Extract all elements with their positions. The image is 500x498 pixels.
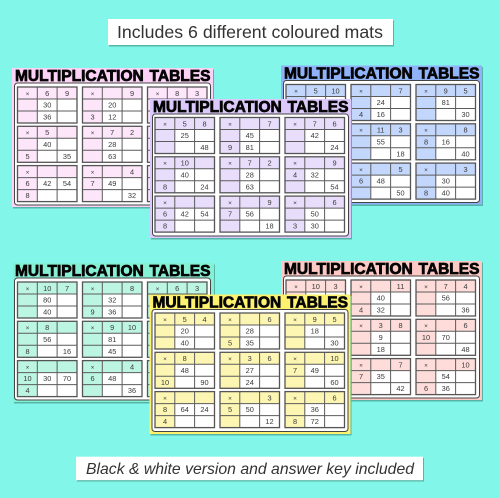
table 7: 64 (181, 405, 189, 414)
table 5 (220, 352, 280, 388)
table 1: × (294, 88, 298, 95)
table 6: 4 (293, 170, 297, 179)
table 2: 12 (108, 112, 116, 122)
table 2: × (359, 88, 363, 95)
table 9: 8 (293, 417, 297, 426)
table 6: 10 (422, 333, 430, 342)
table 1: × (163, 121, 167, 128)
table 1: 10 (43, 284, 51, 293)
table 3: 6 (175, 284, 179, 293)
table 9 (416, 163, 476, 199)
table 5: 7 (110, 128, 114, 137)
table 8 (351, 163, 410, 199)
table 2: 81 (246, 143, 254, 152)
table 7: 54 (63, 179, 71, 188)
table 1: 30 (43, 100, 51, 110)
inner sheet: yellow mat (152, 310, 348, 432)
table 4 (18, 126, 77, 162)
table 3: 7 (313, 119, 317, 128)
table 1: 40 (181, 338, 189, 348)
table 2: 7 (267, 119, 272, 128)
table 8: 3 (267, 393, 272, 402)
table 4: × (163, 356, 167, 363)
table 3: 36 (461, 306, 470, 314)
table 5: 10 (128, 323, 136, 332)
table 4 (155, 157, 214, 193)
inner sheet: pink mat (14, 83, 210, 205)
table 9: 30 (311, 222, 319, 231)
table 1: 4 (202, 315, 207, 324)
table 5: 24 (246, 378, 254, 387)
table 1: 48 (200, 143, 209, 152)
table 8: 50 (246, 405, 254, 414)
table 3: 8 (175, 89, 179, 98)
table 3: 30 (461, 110, 470, 119)
table 1: × (294, 284, 298, 291)
table 1: × (26, 91, 30, 98)
table 8: × (228, 200, 232, 207)
inner sheet: peach mat (284, 276, 480, 398)
table 7: × (163, 395, 167, 402)
table 5: 28 (108, 140, 116, 149)
table 5: 3 (398, 126, 403, 135)
table 5: × (359, 323, 363, 330)
table 9 (148, 166, 207, 202)
table 7: 10 (23, 374, 32, 383)
table 8: 6 (359, 177, 363, 186)
table 2 (351, 84, 410, 120)
table 8: 7 (228, 210, 232, 219)
table 4: × (26, 130, 30, 137)
table 6: 54 (330, 182, 339, 191)
table 8: 7 (398, 360, 403, 369)
table 7: 8 (25, 191, 30, 200)
table 2: 3 (90, 112, 95, 122)
table 2: 4 (359, 306, 363, 314)
table 2: 11 (397, 282, 404, 291)
table 2 (220, 118, 280, 154)
table 5: 63 (246, 182, 254, 191)
table 8: × (91, 364, 95, 371)
table 3: 5 (463, 86, 468, 95)
table 8 (220, 196, 280, 232)
table 3 (285, 313, 344, 349)
table 2 (220, 313, 280, 349)
table 8: 7 (359, 372, 363, 381)
table 5 (351, 124, 410, 160)
table 8: 4 (130, 362, 134, 371)
table 2: 36 (108, 308, 116, 316)
table 9 (285, 196, 344, 232)
table 8: × (359, 362, 363, 369)
table 2: 16 (377, 110, 385, 119)
table 6 (285, 157, 344, 193)
table 8: 36 (128, 386, 136, 395)
table 3: × (293, 121, 297, 128)
table 7: 54 (200, 210, 209, 219)
table 8: 50 (396, 189, 405, 198)
table 8: × (359, 167, 363, 174)
table 4 (155, 352, 214, 388)
table 2 (82, 282, 142, 318)
table 6: 48 (461, 345, 470, 354)
table 2: 24 (377, 98, 385, 107)
table 4: 40 (43, 140, 51, 149)
banner: black and white version note (76, 457, 424, 482)
panel: peach mat (281, 261, 483, 402)
table 7: 6 (163, 210, 167, 219)
table 9: × (293, 395, 297, 402)
table 4: 8 (183, 354, 187, 363)
table 5: 2 (267, 159, 272, 168)
table 6 (148, 126, 207, 162)
table 6: 32 (311, 170, 319, 179)
table 4: 90 (200, 378, 209, 387)
table 6: 10 (330, 354, 339, 363)
table 1: 40 (43, 308, 51, 316)
table 4: 48 (181, 366, 189, 375)
title: peach mat: MULTIPLICATION TABLES (284, 261, 480, 278)
table 1: 10 (331, 86, 340, 95)
table 4: 10 (161, 378, 169, 387)
table 3: 5 (332, 315, 337, 324)
table 8: 48 (108, 374, 116, 383)
table 5: 7 (248, 159, 252, 168)
table 5: 28 (246, 170, 254, 179)
table 2: 35 (246, 338, 254, 348)
inner sheet: purple mat (152, 114, 348, 236)
table 3 (148, 87, 207, 123)
table 3 (148, 282, 207, 318)
table 2: 20 (108, 100, 116, 110)
table 3: × (293, 317, 297, 324)
table 5: 3 (248, 354, 252, 363)
table 9: 8 (424, 189, 428, 198)
table 1: 5 (183, 315, 187, 324)
table 1: 10 (312, 282, 320, 291)
table 8: × (228, 395, 232, 402)
table 2: × (228, 121, 232, 128)
table 8: 56 (246, 210, 254, 219)
table 8 (82, 361, 142, 397)
table 2: 28 (246, 326, 254, 336)
table 9: 50 (311, 210, 319, 219)
table 1: × (163, 317, 167, 324)
table 9: 6 (424, 384, 428, 393)
table 6: 8 (424, 137, 428, 146)
table 4: 40 (181, 170, 189, 179)
table 4: 35 (63, 152, 71, 161)
inner sheet: green mat (14, 278, 210, 400)
table 8: 9 (267, 198, 272, 207)
table 5: × (91, 325, 95, 332)
table 4: 10 (181, 159, 189, 168)
table 6: 6 (463, 321, 468, 330)
table 6: 70 (442, 333, 450, 342)
table 3: 56 (442, 294, 450, 302)
table 7 (286, 163, 346, 199)
table 2: 6 (267, 315, 272, 324)
banner: includes 6 coloured mats (108, 19, 394, 46)
table 8 (220, 392, 280, 428)
table 5: 6 (267, 354, 272, 363)
banner: includes 6 coloured mats: Includes 6 different coloured mats (117, 22, 383, 42)
table 8: 6 (90, 374, 95, 383)
table 4: 5 (45, 128, 49, 137)
table 1 (18, 87, 77, 123)
table 9: × (424, 362, 428, 369)
table 5: × (91, 130, 95, 137)
table 5: 18 (377, 345, 385, 354)
table 9 (148, 361, 207, 397)
table 8: 5 (398, 165, 403, 174)
table 1 (286, 84, 346, 120)
table 5: 81 (108, 335, 116, 344)
table 1 (155, 118, 214, 154)
title: yellow mat: MULTIPLICATION TABLES (152, 294, 348, 311)
table 4 (286, 124, 346, 160)
panel: blue mat (281, 65, 483, 206)
table 5: 9 (379, 333, 383, 342)
table 6: × (424, 128, 428, 135)
table 7: × (26, 169, 30, 176)
table 5: 27 (246, 366, 254, 375)
table 5 (82, 126, 142, 162)
table 7: × (26, 364, 30, 371)
table 5: × (228, 161, 232, 168)
table 4: 24 (200, 182, 209, 191)
table 9: × (293, 200, 297, 207)
table 5: 55 (377, 137, 385, 146)
table 9: 10 (461, 360, 470, 369)
table 5 (82, 321, 142, 357)
table 5: 8 (398, 321, 403, 330)
table 7 (286, 359, 346, 395)
table 6 (416, 319, 476, 355)
table 2: 9 (130, 89, 134, 98)
table 5: × (359, 128, 363, 135)
table 6 (416, 124, 476, 160)
table 5: × (228, 356, 232, 363)
table 5: 18 (396, 149, 405, 158)
table 7 (18, 361, 77, 397)
table 7 (18, 166, 77, 202)
table 3: 9 (313, 315, 317, 324)
table 5 (351, 319, 410, 355)
table 3: 24 (330, 143, 339, 152)
table 2: 40 (377, 294, 385, 302)
table 8 (351, 359, 410, 395)
table 7: 30 (43, 374, 51, 383)
table 8: 4 (130, 167, 134, 176)
table 2: × (228, 317, 232, 324)
table 7: 8 (163, 405, 167, 414)
table 4: × (163, 161, 167, 168)
table 9: 3 (463, 165, 468, 174)
table 3: 81 (442, 98, 450, 107)
table 6: 16 (442, 137, 450, 146)
table 2 (351, 280, 410, 316)
table 8: 5 (228, 405, 232, 414)
table 1: 7 (65, 284, 69, 293)
title: purple mat: MULTIPLICATION TABLES (153, 99, 348, 116)
table 5: 45 (108, 347, 116, 356)
table 5: 63 (108, 152, 116, 161)
table 6: × (293, 161, 297, 168)
table 3 (416, 84, 476, 120)
table 8 (82, 166, 142, 202)
table 3: 3 (195, 284, 199, 293)
table 1: 25 (181, 131, 189, 140)
panel: pink mat (12, 68, 214, 208)
table 3 (285, 118, 344, 154)
table 8: 18 (265, 222, 274, 231)
table 9: 36 (311, 405, 319, 414)
table 4: 16 (63, 347, 71, 356)
table 8: × (91, 169, 95, 176)
table 9: 54 (442, 372, 450, 381)
table 9: 6 (332, 393, 337, 402)
table 3: 18 (311, 326, 319, 336)
table 9 (416, 359, 476, 395)
table 2: 45 (246, 131, 254, 140)
table 2: 8 (130, 284, 134, 293)
table 1: 9 (65, 89, 69, 98)
table 7: 42 (43, 179, 51, 188)
table 1: 36 (43, 112, 51, 122)
table 7: 42 (181, 210, 189, 219)
table 9: 6 (332, 198, 337, 207)
table 4: 8 (45, 323, 49, 332)
table 2 (82, 87, 142, 123)
table 7: 8 (163, 222, 167, 231)
table 1: × (26, 286, 30, 293)
table 6: 8 (463, 126, 468, 135)
table 3: × (424, 284, 428, 291)
table 6: × (424, 323, 428, 330)
table 2: 4 (359, 110, 363, 119)
table 1: 3 (333, 282, 338, 291)
table 5: 9 (110, 323, 114, 332)
table 9: 40 (442, 189, 450, 198)
table 3: 3 (195, 89, 199, 98)
table 8: 48 (377, 177, 385, 186)
table 1: 20 (181, 326, 189, 336)
table 3: × (156, 91, 160, 98)
title: blue mat: MULTIPLICATION TABLES (284, 65, 480, 82)
table 9: 72 (311, 417, 319, 426)
table 1 (286, 280, 346, 316)
table 7: 24 (200, 405, 209, 414)
panel: yellow mat (150, 294, 352, 436)
table 9: 30 (442, 177, 450, 186)
table 4: 5 (25, 152, 30, 161)
table 6: 40 (461, 149, 470, 158)
table 9: × (424, 167, 428, 174)
table 8: 42 (396, 384, 405, 393)
table 4 (18, 321, 77, 357)
table 6: 60 (330, 378, 339, 387)
table 7: 6 (25, 179, 30, 188)
table 3: 42 (311, 131, 319, 140)
table 7 (155, 196, 214, 232)
table 4 (286, 319, 346, 355)
table 3: 30 (330, 338, 339, 348)
table 8: 35 (377, 372, 385, 381)
table 7: 4 (163, 417, 167, 426)
table 6: × (293, 356, 297, 363)
table 1 (18, 282, 77, 318)
table 1: 6 (45, 89, 49, 98)
table 7: 70 (63, 374, 71, 383)
table 3: 6 (332, 119, 337, 128)
table 2: 5 (228, 338, 232, 348)
table 2: 32 (377, 306, 385, 314)
table 8: 49 (108, 179, 116, 188)
table 7: × (163, 200, 167, 207)
table 6 (285, 352, 344, 388)
table 2: × (91, 286, 95, 293)
table 1 (155, 313, 214, 349)
table 1: 8 (202, 119, 207, 128)
table 9 (285, 392, 344, 428)
title: green mat: MULTIPLICATION TABLES (15, 263, 210, 280)
table 2: 9 (90, 308, 95, 316)
table 8: 32 (128, 191, 136, 200)
table 5: 2 (130, 128, 134, 137)
table 6 (148, 321, 207, 357)
table 3: 7 (444, 282, 448, 291)
table 3: 4 (463, 282, 468, 291)
table 6: 49 (311, 366, 319, 375)
table 5: 3 (379, 321, 383, 330)
table 4: 56 (43, 335, 51, 344)
table 1: 5 (183, 119, 187, 128)
table 2: 32 (108, 296, 116, 304)
table 5 (220, 157, 280, 193)
table 4: 8 (25, 347, 30, 356)
inner sheet: blue mat (284, 80, 480, 202)
table 3: × (156, 286, 160, 293)
banner: black and white version note: Black & white version and answer key included (86, 461, 415, 478)
table 9: 36 (442, 384, 450, 393)
table 6: 9 (332, 159, 337, 168)
table 3 (416, 280, 476, 316)
panel: green mat (13, 263, 215, 404)
table 3: × (424, 88, 428, 95)
table 9: 3 (293, 222, 297, 231)
table 1: 5 (314, 86, 318, 95)
table 2: × (91, 91, 95, 98)
panel: purple mat (150, 99, 352, 240)
table 3: 9 (444, 86, 448, 95)
table 7: 4 (25, 386, 30, 395)
table 2: 7 (398, 86, 403, 95)
table 5: 11 (377, 126, 385, 135)
table 2: × (359, 284, 363, 291)
table 8: 7 (90, 179, 95, 188)
table 6: 7 (293, 366, 297, 375)
table 7 (155, 392, 214, 428)
table 2: 9 (228, 143, 232, 152)
title: pink mat: MULTIPLICATION TABLES (15, 68, 210, 85)
table 8: 12 (265, 417, 274, 426)
table 1: 80 (43, 296, 51, 304)
table 4: 8 (163, 182, 167, 191)
table 4: × (26, 325, 30, 332)
